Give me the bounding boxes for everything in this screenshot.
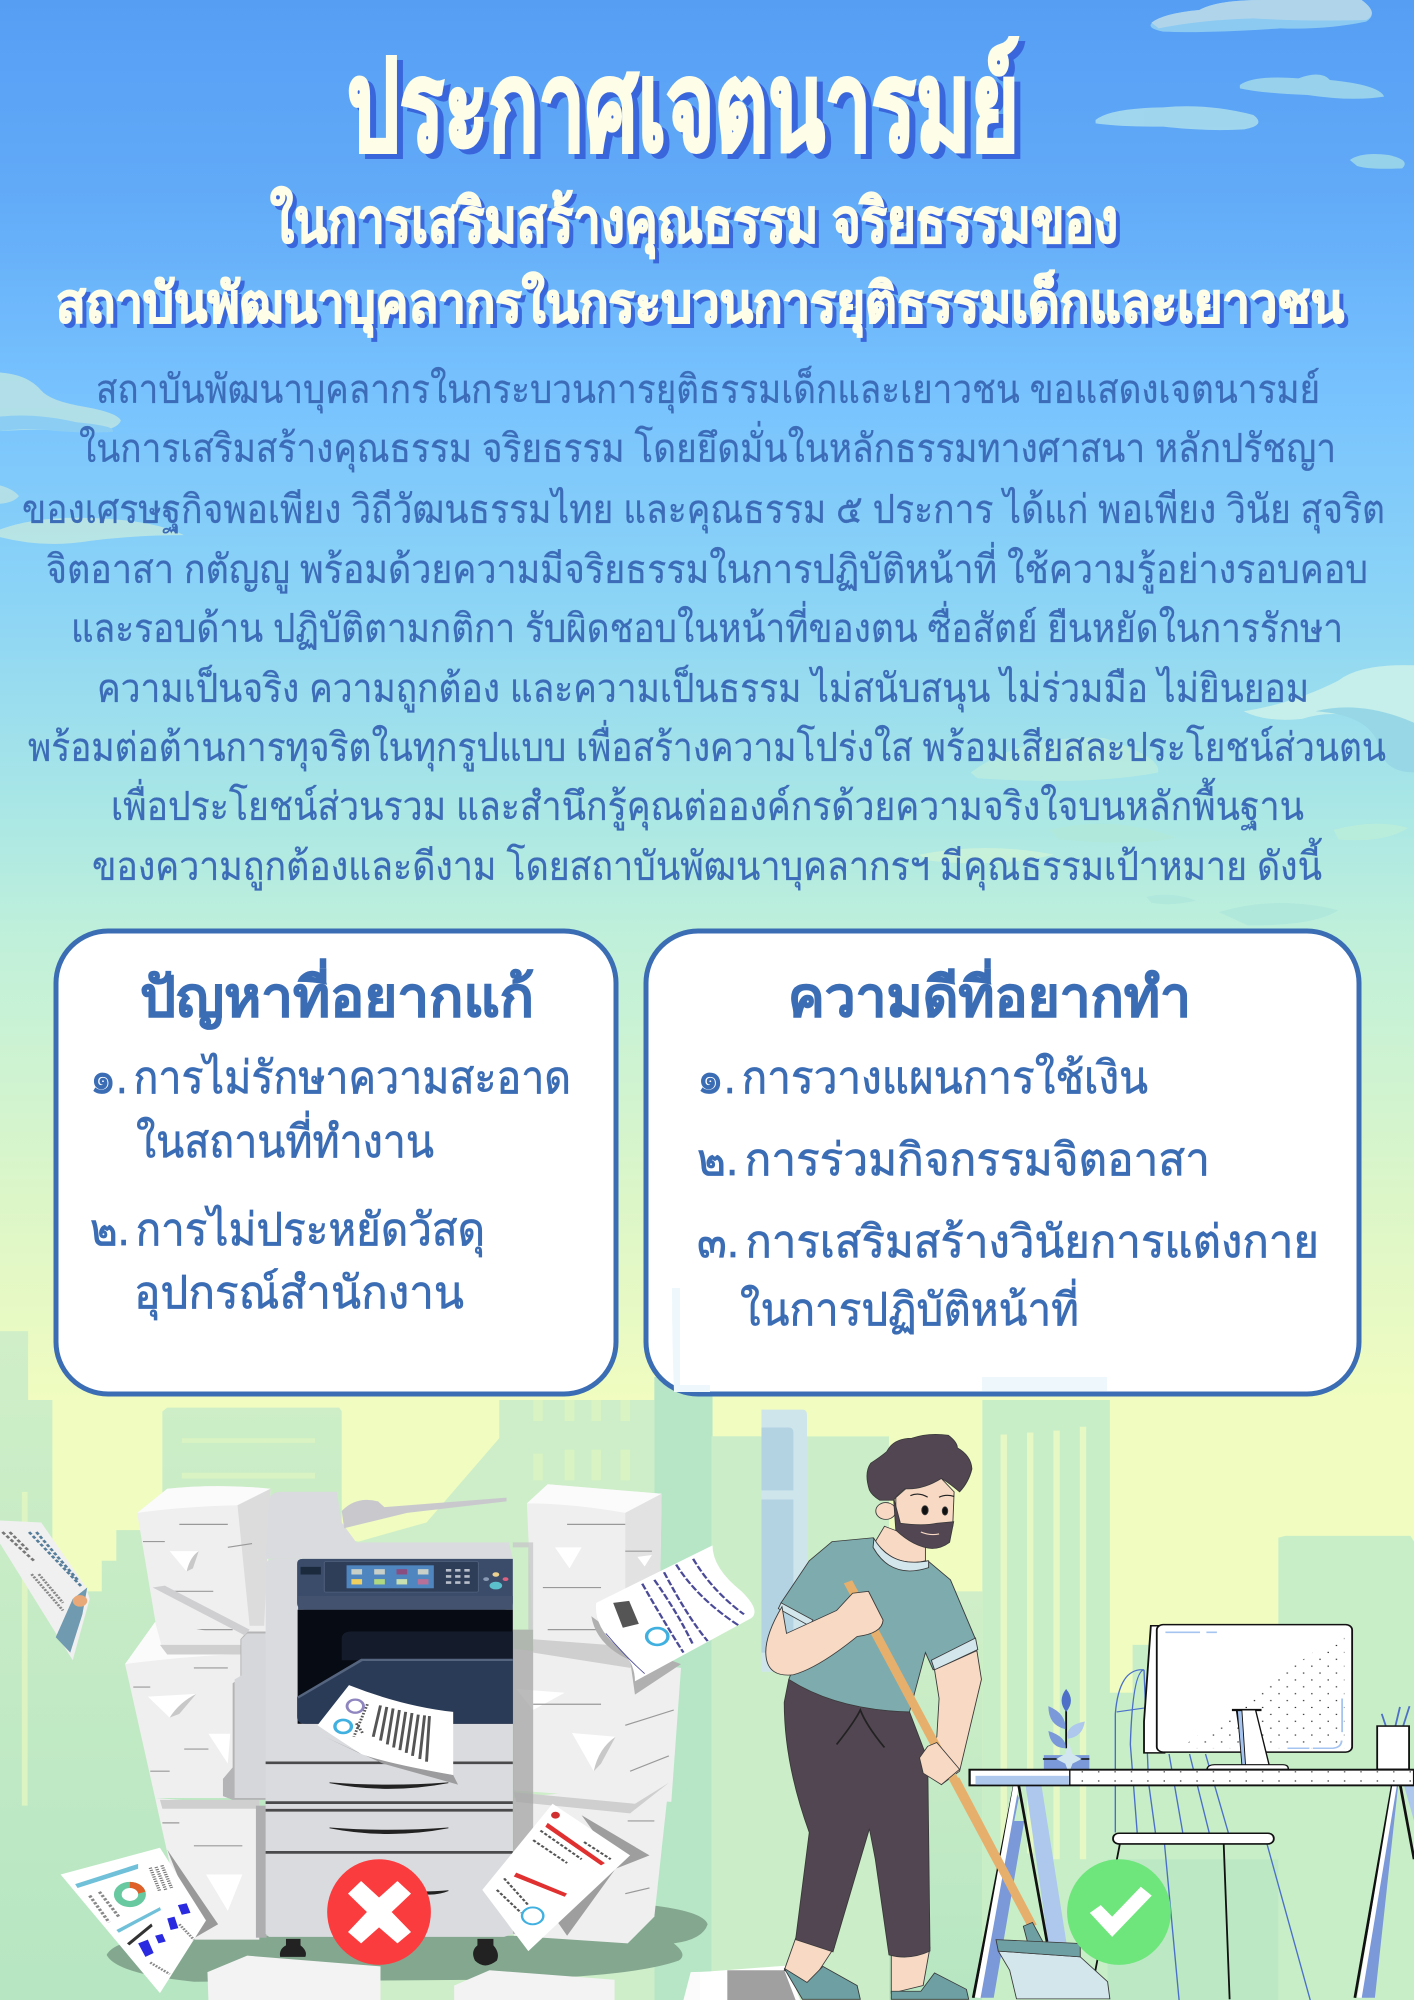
paper stack left lower (155, 1798, 259, 1940)
item 2: ๒. การร่วมกิจกรรมจิตอาสา (697, 1134, 1210, 1185)
clouds: left side (0, 373, 184, 544)
clouds: top right (1096, 0, 1405, 169)
icon: red cross (327, 1859, 431, 1965)
document bottom-left report (61, 1848, 218, 1993)
item 3 continuation: ในการปฏิบัติหน้าที่ (740, 1278, 1079, 1335)
wheels (280, 1939, 306, 1957)
document bottom-right form (482, 1804, 649, 1951)
subtitle line 1: ในการเสริมสร้างคุณธรรม จริยธรรมของ (270, 186, 1118, 259)
paper stack left middle (125, 1622, 245, 1798)
panel: problems hard to solve (56, 931, 616, 1394)
item 2 continuation: อุปกรณ์สำนักงาน (134, 1267, 464, 1320)
desk top (970, 1770, 1414, 1785)
icon: green check (1067, 1859, 1171, 1965)
document right floating (591, 1545, 755, 1695)
illustration: man sweeping (700, 1434, 1032, 2000)
panel: good deeds hard to do (646, 931, 1359, 1394)
head (867, 1434, 972, 1548)
item 1 continuation: ในสถานที่ทำงาน (136, 1110, 434, 1167)
paper stack foreground right (454, 1970, 615, 2000)
trousers (784, 1679, 930, 1957)
paper stack right upper (527, 1484, 662, 1649)
document in tray (317, 1685, 458, 1785)
paper stack left upper (137, 1486, 270, 1649)
neck (875, 1526, 925, 1562)
paper stack right lower (514, 1783, 669, 1943)
t-shirt (781, 1538, 976, 1712)
floor shadow (107, 1903, 708, 1982)
cables (1115, 1670, 1310, 2000)
broom handle (848, 1582, 1032, 1926)
item 3: ๓. การเสริมสร้างวินัยการแต่งกาย (697, 1216, 1319, 1267)
title: ประกาศเจตนารมย์ (347, 36, 1019, 177)
city buildings background right (office side) (700, 1400, 1414, 2000)
monitor (1144, 1625, 1352, 1769)
body paragraph: เพื่อประโยชน์ส่วนรวม และสำนึกรู้คุณต่อองค์กรด้วยความจริงใจบนหลักพื้นฐาน (111, 777, 1304, 831)
item 2: ๒. การไม่ประหยัดวัสดุ (90, 1204, 485, 1257)
plant (1043, 1689, 1089, 1773)
clouds: right side (919, 665, 1414, 926)
lower hand (920, 1743, 960, 1785)
city buildings background left (copier side) (0, 1331, 760, 2000)
left arm (766, 1591, 883, 1675)
drawer lines (266, 1763, 513, 1852)
paper stack right middle (514, 1639, 681, 1802)
tower (761, 1410, 807, 1672)
heading: ความดีที่อยากทำ (788, 958, 1191, 1028)
desk legs (973, 1786, 1414, 1998)
illustration: office desk (970, 1625, 1414, 2000)
item 1: ๑. การวางแผนการใช้เงิน (697, 1052, 1148, 1103)
output bay (298, 1610, 513, 1724)
stripes sheet piece (700, 1966, 800, 2000)
copier body (153, 1492, 533, 1965)
heading: ปัญหาที่อยากแก้ (140, 958, 534, 1030)
illustration: copier with paper stacks (0, 1484, 760, 2000)
right arm (921, 1651, 981, 1785)
control panel (297, 1559, 513, 1610)
broom lower handle and head (955, 1779, 1110, 1999)
pen cup (1377, 1706, 1410, 1769)
body paragraph (22, 365, 1386, 891)
document top-left falling (0, 1521, 90, 1660)
paper stack foreground centre (207, 1956, 380, 2000)
item 1: ๑. การไม่รักษาความสะอาด (90, 1052, 571, 1103)
paper sheet with stripes at the bottom (683, 1970, 760, 2000)
legs and feet (784, 1936, 930, 1993)
stool (1094, 1833, 1274, 1999)
